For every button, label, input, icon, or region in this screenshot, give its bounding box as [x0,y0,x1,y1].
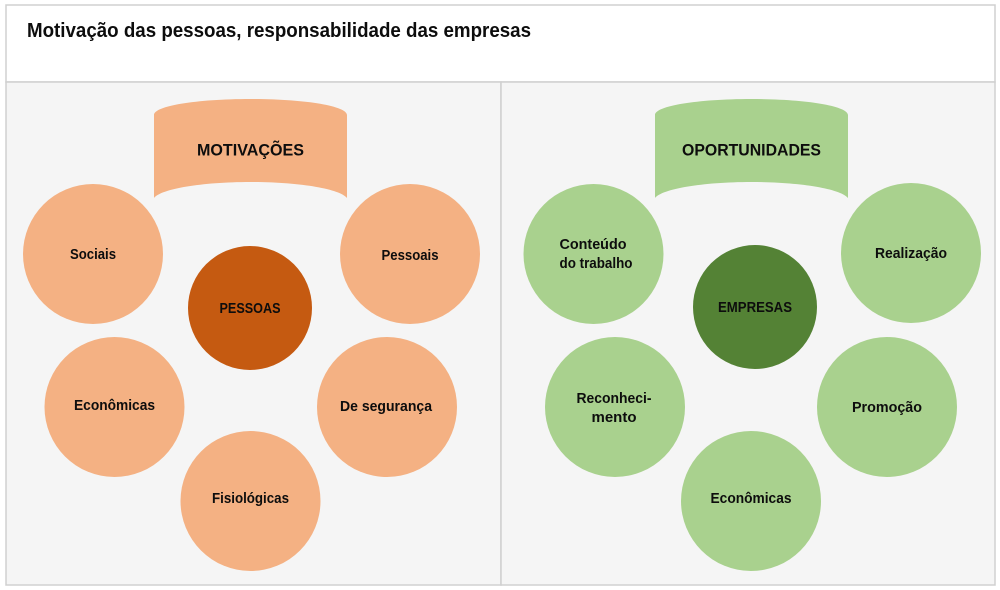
circle: sociais [23,184,163,324]
circle: conteúdo do trabalho: do trabalho [560,255,632,272]
circle: de segurança: De segurança [340,398,433,415]
circle: pessoais [340,184,480,324]
circle: fisiológicas: Fisiológicas [212,490,289,507]
circle: fisiológicas [180,431,320,571]
circle: pessoais: Pessoais [382,247,438,264]
circle: promoção: Promoção [852,399,922,416]
center circle: pessoas: PESSOAS [220,300,280,317]
circle: econômicas: Econômicas [710,490,792,507]
circle: econômicas: Econômicas [74,397,155,414]
circle: realização: Realização [875,245,947,262]
circle: sociais: Sociais [70,246,116,263]
center circle: empresas: EMPRESAS [718,299,792,316]
circle: conteúdo do trabalho [524,184,664,324]
circle: conteúdo do trabalho: Conteúdo [560,236,626,253]
circle: econômicas [681,431,821,571]
circle: promoção [817,337,957,477]
circle: reconhecimento: Reconheci- [576,390,652,407]
circle: realização [841,183,981,323]
banner: oportunidades [655,99,848,198]
circle: de segurança [317,337,457,477]
header panel [6,5,995,82]
circle: econômicas [44,337,184,477]
banner: motivações: MOTIVAÇÕES [197,140,304,160]
center circle: pessoas [188,246,312,370]
center circle: empresas [693,245,817,369]
circle: reconhecimento: mento [592,409,636,426]
panel: motivações [6,82,501,585]
banner: oportunidades: OPORTUNIDADES [682,140,821,160]
title: Motivação das pessoas, responsabilidade das empresas [27,20,531,42]
circle: reconhecimento [545,337,685,477]
panel: oportunidades [501,82,995,585]
banner: motivações [154,99,347,198]
